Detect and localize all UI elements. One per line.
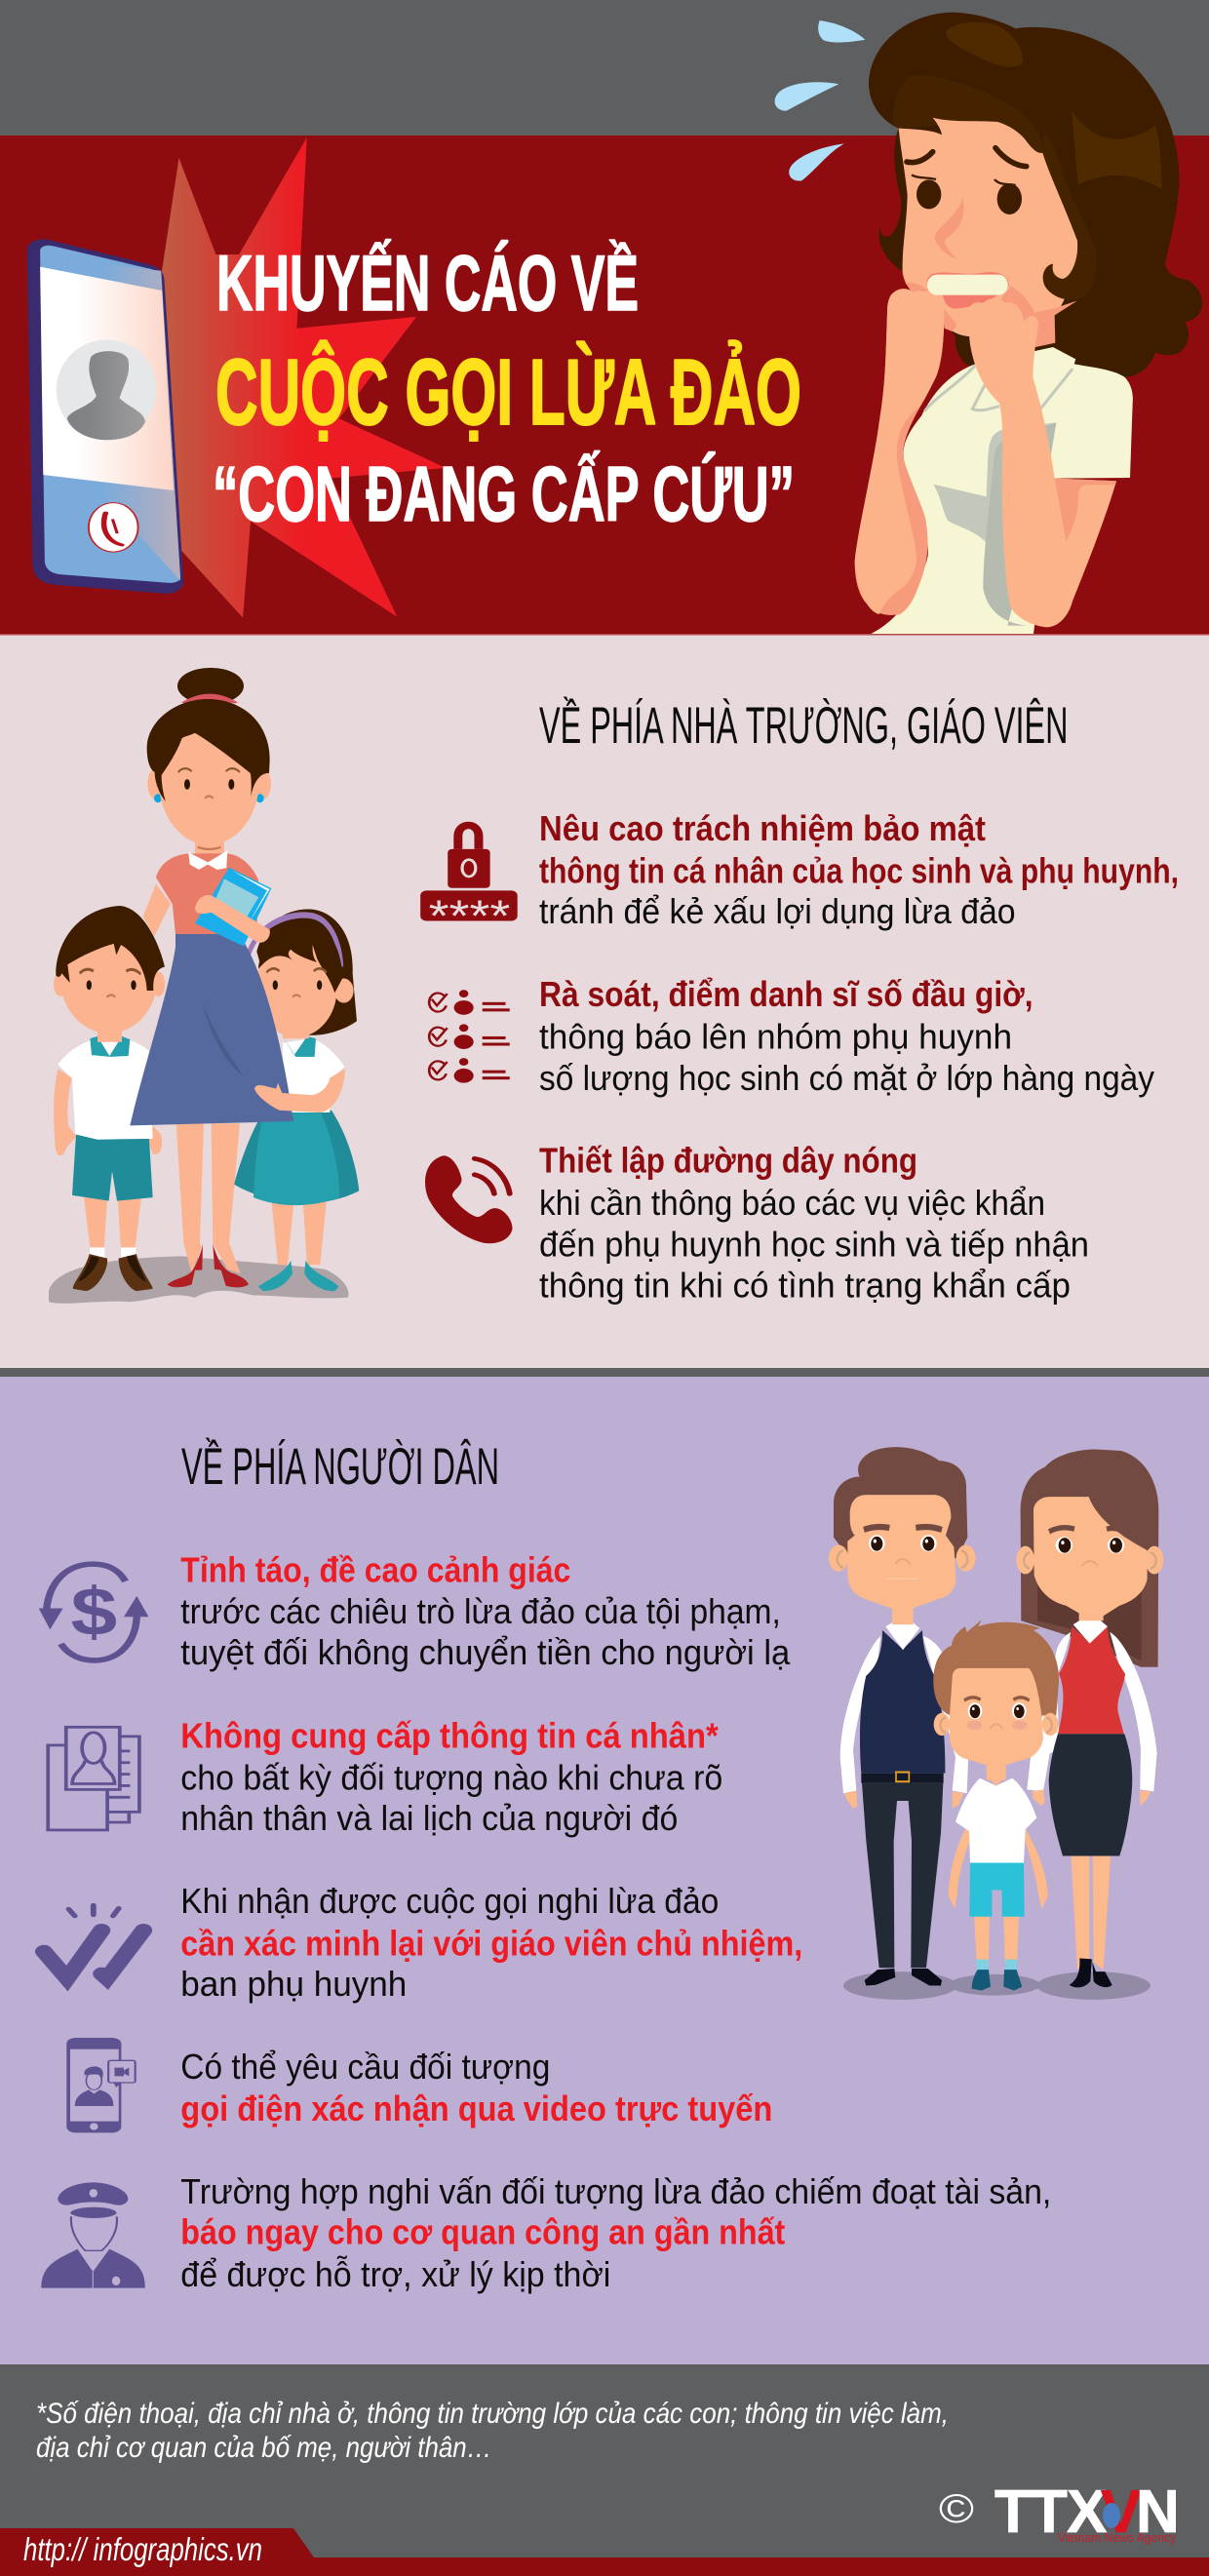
- text: request video call: gọi điện xác nhận qua video trực tuyến: [180, 2088, 772, 2128]
- text: verify with teacher: Khi nhận được cuộc gọi nghi lừa đảo: [180, 1881, 719, 1921]
- text: report to police: [180, 2171, 1051, 2294]
- text: request video call: [180, 2047, 772, 2128]
- icon: police officer: [41, 2182, 145, 2288]
- text: stay alert: trước các chiêu trò lừa đảo của tội phạm,: [180, 1591, 781, 1631]
- icon: padlock with password: ****: [429, 891, 510, 941]
- title: CUỘC GỌI LỪA ĐẢO: [215, 339, 801, 445]
- text: roll call: số lượng học sinh có mặt ở lớp hàng ngày: [539, 1058, 1154, 1098]
- text: hotline: khi cần thông báo các vụ việc khẩn: [539, 1183, 1045, 1223]
- boy: [54, 906, 165, 1291]
- text: report to police: báo ngay cho cơ quan công an gần nhất: [180, 2212, 785, 2252]
- icon: double check: [44, 1905, 143, 1978]
- text: do not share info: [180, 1716, 722, 1838]
- icon: sweat drops: [775, 20, 865, 180]
- logo: TTXVN: Vietnam News Agency: [1058, 2530, 1176, 2545]
- footnote: [36, 2398, 949, 2464]
- text: hotline: đến phụ huynh học sinh và tiếp nhận: [539, 1225, 1089, 1264]
- girl's arm: [254, 1069, 345, 1112]
- text: do not share info: Không cung cấp thông tin cá nhân*: [180, 1716, 719, 1756]
- panel: school and teachers: [0, 634, 1209, 1368]
- logo: TTXVN: TTXVN: [994, 2478, 1180, 2546]
- text: protect personal information: Nêu cao trách nhiệm bảo mật: [539, 808, 986, 848]
- girl: [234, 909, 359, 1291]
- title: KHUYẾN CÁO VỀ: [216, 239, 639, 328]
- text: roll call: thông báo lên nhóm phụ huynh: [539, 1016, 1012, 1057]
- text: protect personal information: [539, 808, 1179, 931]
- heading: citizens side: VỀ PHÍA NGƯỜI DÂN: [181, 1437, 499, 1496]
- website tab: http:// infographics.vn: [23, 2531, 262, 2567]
- text: stay alert: tuyệt đối không chuyển tiền cho người lạ: [180, 1632, 791, 1672]
- icon: personal documents: [48, 1727, 139, 1830]
- website tab: [0, 2528, 1209, 2576]
- panel: citizens: [0, 1377, 1209, 2365]
- text: do not share info: nhân thân và lai lịch của người đó: [180, 1798, 678, 1838]
- title: “CON ĐANG CẤP CỨU”: [213, 450, 795, 537]
- icon: phone: [27, 239, 183, 594]
- text: hotline: Thiết lập đường dây nóng: [539, 1141, 917, 1181]
- panel: footer: [0, 2364, 1209, 2576]
- text: roll call: [539, 974, 1154, 1098]
- text: hotline: [539, 1141, 1089, 1305]
- teacher: [130, 668, 293, 1287]
- text: report to police: Trường hợp nghi vấn đối tượng lừa đảo chiếm đoạt tài sản,: [180, 2171, 1051, 2211]
- icon: attendance checklist: [429, 990, 510, 1083]
- icon: money exchange: [39, 1564, 148, 1660]
- text: protect personal information: tránh để kẻ xấu lợi dụng lừa đảo: [539, 891, 1016, 931]
- text: hotline: thông tin khi có tình trạng khẩn cấp: [539, 1266, 1071, 1305]
- illustration: teacher with two pupils: [49, 668, 359, 1304]
- icon: video call phone: [66, 2038, 136, 2132]
- text: stay alert: Tỉnh táo, đề cao cảnh giác: [180, 1550, 570, 1590]
- copyright symbol: ©: [939, 2485, 974, 2531]
- starburst: [162, 137, 446, 617]
- panel: header background: [0, 0, 1209, 634]
- man: [829, 1447, 976, 1985]
- woman: [1016, 1449, 1163, 1987]
- title: [213, 239, 801, 537]
- text: verify with teacher: [180, 1881, 802, 2004]
- icon: money exchange: $: [71, 1575, 117, 1650]
- footnote: địa chỉ cơ quan của bố mẹ, người thân…: [36, 2432, 491, 2464]
- boy: [933, 1620, 1059, 1991]
- illustration: worried woman: [855, 13, 1202, 634]
- illustration: family: [829, 1447, 1163, 2000]
- footnote: *Số điện thoại, địa chỉ nhà ở, thông tin trường lớp của các con; thông tin việc làm,: [36, 2398, 949, 2430]
- text: verify with teacher: cần xác minh lại với giáo viên chủ nhiệm,: [180, 1923, 802, 1963]
- icon: hotline phone: [425, 1155, 512, 1243]
- text: request video call: Có thể yêu cầu đối tượng: [180, 2047, 550, 2087]
- text: report to police: để được hỗ trợ, xử lý kịp thời: [180, 2254, 610, 2294]
- text: stay alert: [180, 1550, 791, 1672]
- icon: padlock with password: [420, 825, 518, 941]
- text: do not share info: cho bất kỳ đối tượng nào khi chưa rõ: [180, 1757, 722, 1797]
- text: verify with teacher: ban phụ huynh: [180, 1964, 407, 2004]
- text: roll call: Rà soát, điểm danh sĩ số đầu giờ,: [539, 974, 1034, 1014]
